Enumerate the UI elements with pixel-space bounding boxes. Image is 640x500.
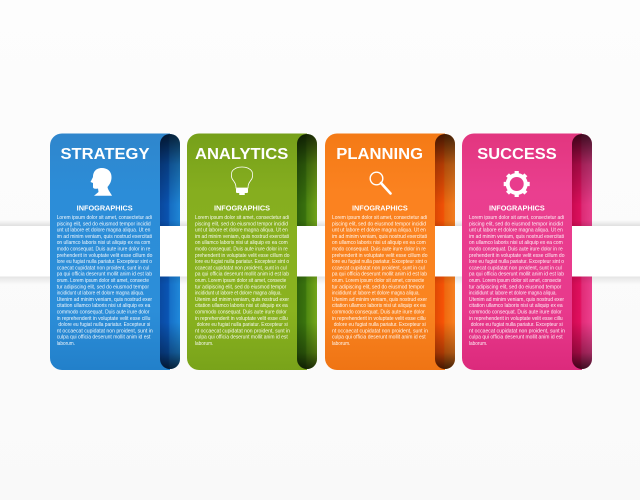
body text: citation ullamco laboris nisi ut aliquip ex ea — [469, 303, 563, 309]
heading: planning: PLANNING — [336, 146, 423, 163]
body text: on ullamco laboris nisi ut aliquip ex ea com — [195, 240, 288, 246]
panel: strategy — [50, 134, 160, 370]
body text: in reprehenderit in voluptate velit esse cillu — [195, 316, 288, 322]
body text: nt occaecat cupidatat non proident, sunt in — [469, 328, 565, 334]
body text: prehenderit in voluptate velit esse cillum do — [469, 253, 565, 259]
body text: tur adipiscing elit, sed do eiusmod tempor — [57, 284, 149, 290]
body text: piscing elit, sed do eiusmod tempor incidid — [332, 221, 426, 227]
body text: orum. Lorem ipsum dolor sit amet, consecte — [469, 278, 561, 284]
body text: laborum. — [332, 341, 350, 347]
body text: on ullamco laboris nisi ut aliquip ex ea com — [469, 240, 563, 246]
body text: ccaecat cupidatat non proident, sunt in cul — [469, 265, 562, 271]
body text: im ad minim veniam, quis nostrud exercitati — [195, 234, 289, 240]
body text: Lorem ipsum dolor sit amet, consectetur adi — [57, 215, 152, 221]
panel: analytics — [187, 134, 297, 370]
body text: tur adipiscing elit, sed do eiusmod tempor — [195, 284, 287, 290]
body text: unt ut labore et dolore magna aliqua. Ut en — [469, 228, 563, 234]
body text: citation ullamco laboris nisi ut aliquip ex ea — [332, 303, 426, 309]
body text: culpa qui officia deserunt mollit anim id est — [57, 335, 151, 341]
body text: dolore eu fugiat nulla pariatur. Excepteur si — [471, 322, 563, 328]
icon: magnifier — [370, 172, 390, 194]
subheading: INFOGRAPHICS — [352, 206, 408, 212]
subheading: INFOGRAPHICS — [214, 206, 270, 212]
body text: in reprehenderit in voluptate velit esse cillu — [57, 316, 150, 322]
body text: in reprehenderit in voluptate velit esse cillu — [469, 316, 563, 322]
panel: planning — [325, 134, 435, 370]
body text: dolore eu fugiat nulla pariatur. Excepteur si — [197, 322, 288, 328]
body text: tur adipiscing elit, sed do eiusmod tempor — [469, 284, 562, 290]
body text: piscing elit, sed do eiusmod tempor incidid — [469, 221, 563, 227]
heading: success: SUCCESS — [477, 146, 557, 163]
body text: nt occaecat cupidatat non proident, sunt in — [195, 328, 290, 334]
body text: tur adipiscing elit, sed do eiusmod tempor — [332, 284, 425, 290]
body text: modo consequat. Duis aute irure dolor in re — [57, 246, 151, 252]
body text: orum. Lorem ipsum dolor sit amet, consecte — [332, 278, 424, 284]
body text: in reprehenderit in voluptate velit esse cillu — [332, 316, 426, 322]
body text: piscing elit, sed do eiusmod tempor incidid — [57, 221, 151, 227]
body text: dolore eu fugiat nulla pariatur. Excepteur si — [58, 322, 150, 328]
body text: Lorem ipsum dolor sit amet, consectetur adi — [469, 215, 564, 221]
body text: culpa qui officia deserunt mollit anim id est — [195, 335, 288, 341]
body text: unt ut labore et dolore magna aliqua. Ut en — [195, 228, 288, 234]
body text: commodo consequat. Duis aute irure dolor — [469, 310, 562, 316]
body text: orum. Lorem ipsum dolor sit amet, consecte — [57, 278, 149, 284]
body text: unt ut labore et dolore magna aliqua. Ut en — [57, 228, 151, 234]
body text: ccaecat cupidatat non proident, sunt in cul — [332, 265, 425, 271]
body text: laborum. — [195, 341, 213, 347]
body text: incididunt ut labore et dolore magna aliqua. — [57, 291, 144, 297]
body text: nt occaecat cupidatat non proident, sunt in — [332, 328, 428, 334]
body text: on ullamco laboris nisi ut aliquip ex ea com — [57, 240, 150, 246]
body text: laborum. — [57, 341, 75, 347]
subheading: INFOGRAPHICS — [489, 206, 545, 212]
body text: citation ullamco laboris nisi ut aliquip ex ea — [57, 303, 151, 309]
body text: pa qui officia deserunt mollit anim id est lab — [332, 272, 427, 278]
subheading: INFOGRAPHICS — [77, 206, 133, 212]
body text: lore eu fugiat nulla pariatur. Excepteur sint o — [195, 259, 289, 265]
body text: ccaecat cupidatat non proident, sunt in cul — [57, 265, 149, 271]
heading: analytics: ANALYTICS — [195, 146, 289, 163]
ribbon back: blue — [160, 134, 180, 370]
body text: culpa qui officia deserunt mollit anim id est — [332, 335, 426, 341]
body text: laborum. — [469, 341, 487, 347]
body text: modo consequat. Duis aute irure dolor in re — [195, 246, 288, 252]
body text: pa qui officia deserunt mollit anim id est lab — [195, 272, 289, 278]
icon: light bulb — [231, 167, 253, 195]
body text: incididunt ut labore et dolore magna aliqua. — [332, 291, 420, 297]
body text: on ullamco laboris nisi ut aliquip ex ea com — [332, 240, 426, 246]
body text: prehenderit in voluptate velit esse cillum do — [57, 253, 153, 259]
body text: commodo consequat. Duis aute irure dolor — [57, 310, 150, 316]
body text: incididunt ut labore et dolore magna aliqua. — [469, 291, 557, 297]
ribbon back: pink — [572, 134, 592, 370]
body text: piscing elit, sed do eiusmod tempor incidid — [195, 221, 288, 227]
body text: nt occaecat cupidatat non proident, sunt in — [57, 328, 153, 334]
body text: incididunt ut labore et dolore magna aliqua. — [195, 291, 282, 297]
body text: lore eu fugiat nulla pariatur. Excepteur sint o — [332, 259, 427, 265]
body text: prehenderit in voluptate velit esse cillum do — [332, 253, 428, 259]
body text: ccaecat cupidatat non proident, sunt in cul — [195, 265, 287, 271]
body text: culpa qui officia deserunt mollit anim id est — [469, 335, 563, 341]
icon: gear — [504, 171, 530, 197]
body text — [57, 215, 153, 347]
ribbon back: orange — [435, 134, 455, 370]
body text: Utenim ad minim veniam, quis nostrud exer — [195, 297, 289, 303]
body text: unt ut labore et dolore magna aliqua. Ut en — [332, 228, 426, 234]
body text: modo consequat. Duis aute irure dolor in re — [332, 246, 426, 252]
body text: im ad minim veniam, quis nostrud exercitati — [332, 234, 427, 240]
body text: modo consequat. Duis aute irure dolor in re — [469, 246, 563, 252]
body text — [195, 215, 290, 347]
icon: head — [90, 168, 112, 196]
body text: pa qui officia deserunt mollit anim id est lab — [57, 272, 152, 278]
body text: dolore eu fugiat nulla pariatur. Excepteur si — [334, 322, 426, 328]
body text: Utenim ad minim veniam, quis nostrud exer — [469, 297, 564, 303]
body text: im ad minim veniam, quis nostrud exercitati — [57, 234, 152, 240]
body text: commodo consequat. Duis aute irure dolor — [195, 310, 287, 316]
body text: lore eu fugiat nulla pariatur. Excepteur sint o — [57, 259, 152, 265]
heading: strategy: STRATEGY — [60, 146, 150, 163]
body text: lore eu fugiat nulla pariatur. Excepteur sint o — [469, 259, 564, 265]
ribbon back: green — [297, 134, 317, 370]
body text: Utenim ad minim veniam, quis nostrud exer — [57, 297, 152, 303]
body text — [469, 215, 565, 347]
body text: Lorem ipsum dolor sit amet, consectetur adi — [195, 215, 289, 221]
body text — [332, 215, 428, 347]
white horizontal band — [0, 220, 640, 284]
body text: im ad minim veniam, quis nostrud exercitati — [469, 234, 564, 240]
body text: pa qui officia deserunt mollit anim id est lab — [469, 272, 564, 278]
body text: citation ullamco laboris nisi ut aliquip ex ea — [195, 303, 288, 309]
body text: Lorem ipsum dolor sit amet, consectetur adi — [332, 215, 427, 221]
body text: prehenderit in voluptate velit esse cillum do — [195, 253, 290, 259]
body text: Utenim ad minim veniam, quis nostrud exer — [332, 297, 427, 303]
body text: commodo consequat. Duis aute irure dolor — [332, 310, 425, 316]
panel: success — [462, 134, 572, 370]
body text: orum. Lorem ipsum dolor sit amet, consecte — [195, 278, 286, 284]
